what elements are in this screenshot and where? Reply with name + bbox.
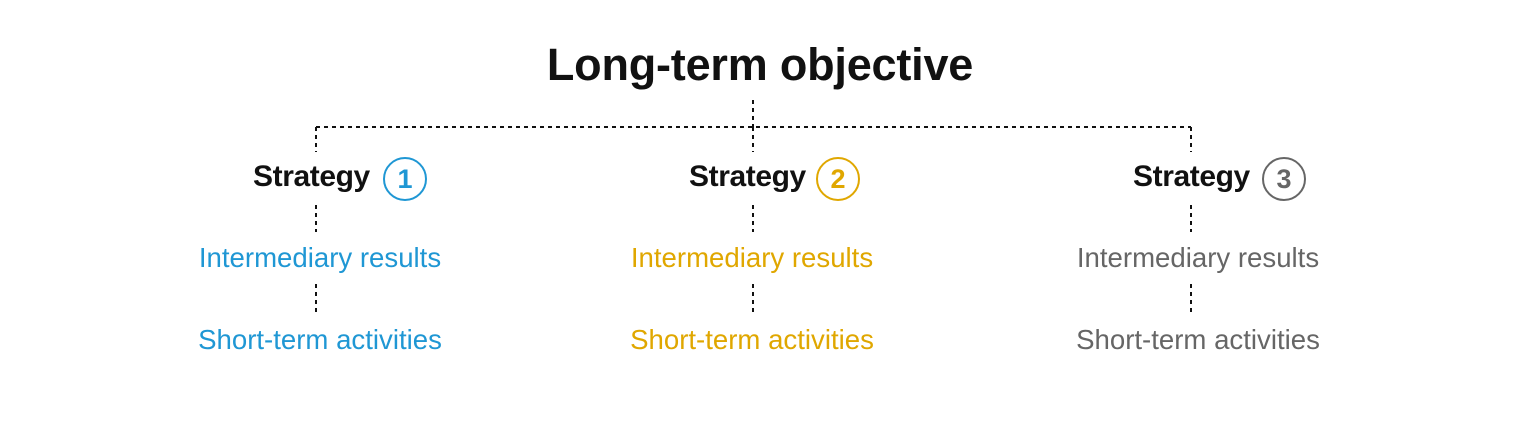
badge 1 bbox=[383, 157, 427, 201]
title: Long-term objective bbox=[547, 39, 973, 90]
results 2: Intermediary results bbox=[631, 242, 873, 273]
strategy 2: Strategy bbox=[689, 160, 806, 193]
badge 2 bbox=[816, 157, 860, 201]
activities 1: Short-term activities bbox=[198, 324, 442, 355]
results 1: Intermediary results bbox=[199, 242, 441, 273]
strategy 3: Strategy bbox=[1133, 160, 1250, 193]
badge 3 bbox=[1262, 157, 1306, 201]
badge 3: 3 bbox=[1276, 164, 1292, 194]
results 3: Intermediary results bbox=[1077, 242, 1319, 273]
badge 2: 2 bbox=[830, 164, 846, 194]
badge 1: 1 bbox=[397, 164, 413, 194]
activities 2: Short-term activities bbox=[630, 324, 874, 355]
activities 3: Short-term activities bbox=[1076, 324, 1320, 355]
strategy 1: Strategy bbox=[253, 160, 370, 193]
